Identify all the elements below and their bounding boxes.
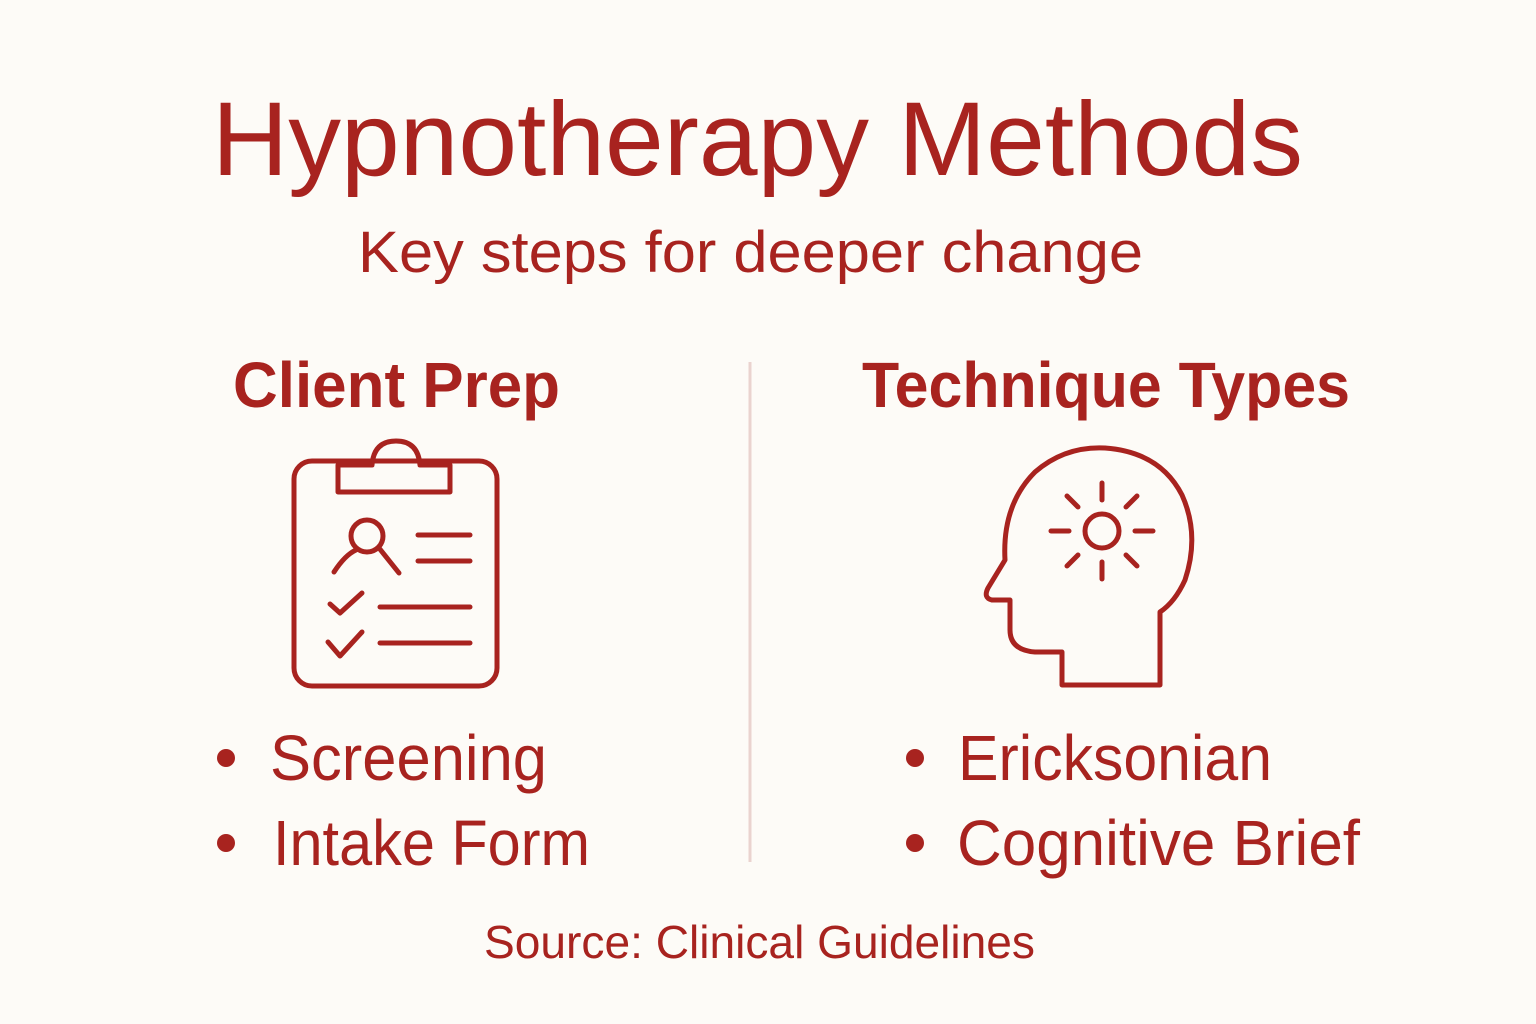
icon: head with sun — [986, 448, 1192, 685]
bullet list: technique types: Ericksonian — [958, 722, 1272, 794]
bullet list: technique types — [906, 722, 1360, 879]
panel: technique types — [862, 349, 1360, 879]
title: Hypnotherapy Methods — [212, 81, 1303, 198]
icon: clipboard — [294, 441, 497, 686]
heading: client prep: Client Prep — [233, 349, 560, 421]
subtitle: Key steps for deeper change — [358, 220, 1143, 285]
panel: client prep — [217, 349, 590, 879]
bullet list: client prep: Intake Form — [273, 807, 590, 879]
source: Source: Clinical Guidelines — [484, 916, 1035, 968]
bullet list: technique types: Cognitive Brief — [957, 807, 1360, 879]
divider — [748, 362, 752, 862]
heading: technique types: Technique Types — [862, 349, 1350, 421]
bullet list: client prep — [217, 722, 590, 879]
bullet list: client prep: Screening — [270, 722, 547, 794]
